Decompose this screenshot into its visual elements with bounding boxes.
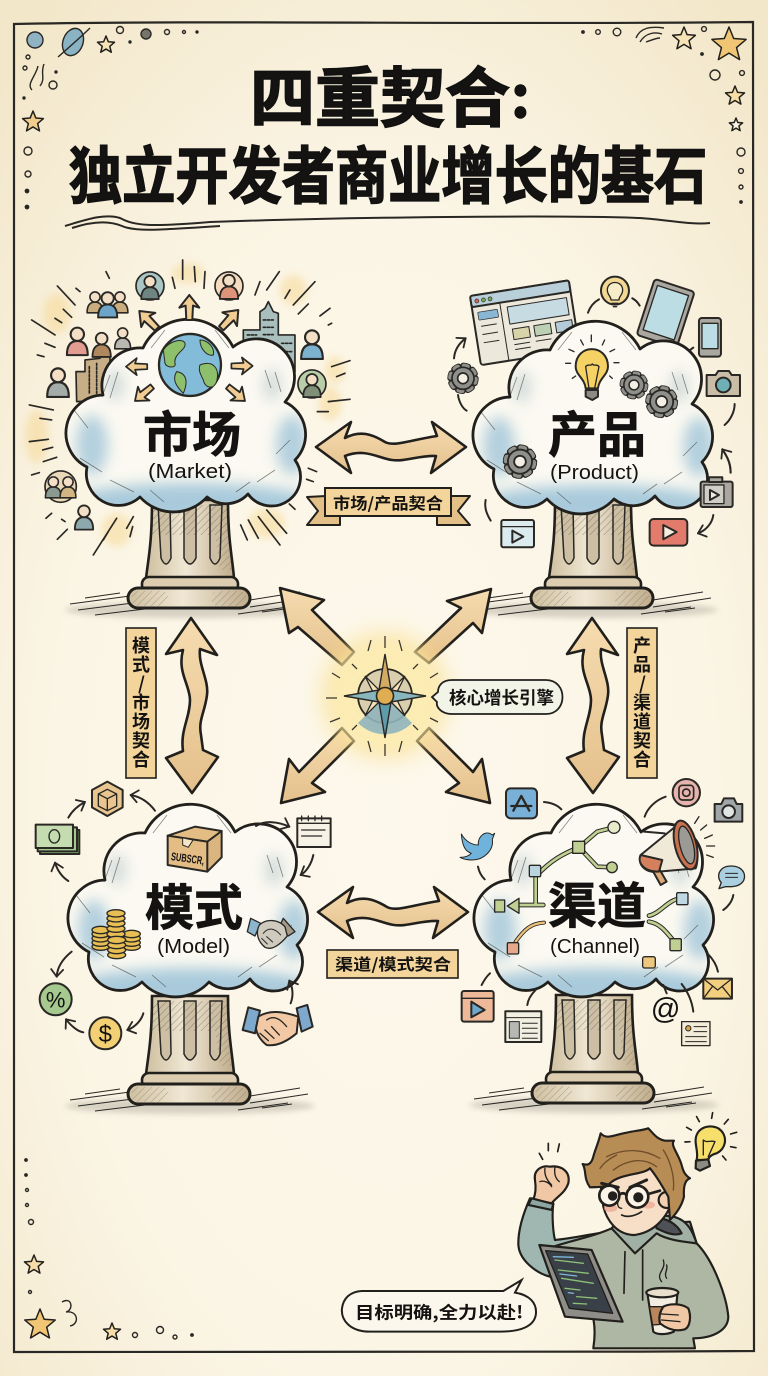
label: (Market): (Market): [148, 461, 232, 483]
corner decoration: bottom left: [24, 1159, 193, 1339]
column: channel: [469, 995, 719, 1113]
cloud: market: [65, 319, 315, 523]
icon: tablet: [637, 279, 695, 348]
glasses: [599, 1186, 660, 1208]
arrow: market-product: [316, 422, 466, 473]
people icons: [45, 272, 326, 530]
label: 模式: 模式: [145, 869, 243, 940]
icon: cube badge: [92, 782, 123, 816]
ribbon: market-product fit: [307, 488, 470, 525]
panel: market: [25, 260, 350, 618]
arrow: to product: [415, 589, 491, 663]
icon: browser window: [470, 280, 580, 365]
column: product: [468, 500, 718, 618]
market illustration behind cloud: [25, 260, 350, 555]
coffee cup: [648, 1295, 677, 1334]
icon: gears: [506, 373, 675, 476]
icon: subscription box: [168, 827, 222, 872]
label: model-market fit: 模式/市场契合: [132, 632, 150, 772]
icon: coins: [92, 910, 140, 959]
hoodie: [553, 1222, 728, 1348]
arrow: channel-model: [318, 887, 468, 938]
product icons behind cloud: [450, 277, 740, 521]
bubble: core growth engine: [432, 680, 562, 714]
icon: gear outside: [450, 338, 476, 411]
icon: calendar: [297, 816, 331, 847]
label: (Product): (Product): [550, 462, 639, 484]
icon: phone: [686, 318, 721, 357]
icon: at sign: @: [651, 992, 681, 1025]
character: developer: [518, 1113, 737, 1348]
hood: [612, 1216, 697, 1253]
label: (Model): (Model): [157, 936, 230, 958]
title: 四重契合: [250, 46, 510, 140]
buildings: [76, 302, 295, 402]
head: [600, 1166, 673, 1235]
channel icons: [460, 779, 745, 1046]
icon: mail: [703, 979, 732, 999]
icon: handshake gray: [247, 918, 295, 948]
icon: subscription box: SUBSCR,: [170, 851, 205, 868]
icon: bird: [460, 833, 495, 860]
corner decoration: top left: [23, 25, 198, 209]
icon: percent coin: [40, 983, 72, 1015]
icon: bulb badge: [588, 277, 640, 313]
connector strokes: [478, 797, 733, 1012]
icon: camera: [715, 798, 742, 822]
title: [69, 46, 707, 216]
icon: percent coin: %: [46, 987, 65, 1012]
arrow: to channel: [417, 728, 490, 803]
diagonal arrows: core engine: [280, 588, 491, 803]
icon: network lines: [495, 821, 688, 968]
model flow arrows: [55, 795, 313, 1032]
cloud: product: [472, 321, 722, 525]
column: market: [65, 500, 315, 618]
speech bubble: 目标明确,全力以赴!: [355, 1298, 523, 1323]
title: :: [511, 50, 530, 134]
sleeve: raised arm: [518, 1198, 613, 1277]
arrow: model-market: [166, 618, 218, 793]
icon: video window: [501, 520, 534, 547]
product icons over cloud: [501, 335, 733, 547]
cloud: model: [67, 804, 317, 1008]
arrow: to model: [281, 728, 354, 803]
icon: dollar coin: [89, 1017, 121, 1049]
tablet: [539, 1245, 623, 1322]
icon: app store: [506, 788, 537, 818]
cloud: channel: [473, 804, 723, 1008]
icon: instagram: [673, 779, 700, 806]
icon: play window: [462, 991, 494, 1022]
column: model: [65, 996, 315, 1114]
icon: megaphone: [640, 817, 715, 885]
label: product-channel fit: 产品/渠道契合: [633, 632, 651, 772]
label: (Channel): (Channel): [550, 936, 640, 958]
icon: chat bubble: [719, 866, 745, 889]
icon: red play: [650, 519, 687, 546]
label: product-channel fit: [627, 628, 657, 778]
label: channel-model fit: 渠道/模式契合: [335, 951, 451, 975]
label: 产品: 产品: [548, 396, 646, 467]
compass: [323, 634, 447, 758]
panel: model: [36, 782, 331, 1114]
arrow: product-channel: [567, 618, 619, 793]
hand: [659, 1304, 690, 1330]
title underline: [65, 216, 710, 230]
bulb: [696, 1126, 725, 1160]
panel: product: [450, 277, 740, 618]
panel: channel: [460, 779, 745, 1113]
fist: [533, 1166, 569, 1203]
label: 渠道: 渠道: [548, 867, 646, 938]
model icons: [36, 782, 331, 1049]
label: model-market fit: [126, 628, 156, 778]
arrow: to market: [280, 588, 354, 665]
label: channel-model fit: [327, 950, 458, 978]
ribbon: market-product fit: 市场/产品契合: [333, 490, 443, 514]
icon: dollar coin: $: [99, 1021, 112, 1048]
label: 市场: 市场: [143, 396, 241, 467]
bubble: core growth engine: 核心增长引擎: [449, 685, 554, 710]
icon: light bulb: [566, 335, 619, 400]
icon: handshake: [243, 1005, 313, 1045]
title: 独立开发者商业增长的基石: [69, 126, 707, 216]
hair: [583, 1128, 690, 1220]
icon: article window: [505, 1011, 541, 1042]
icon: video camera: [698, 477, 733, 533]
icon: camera: [707, 371, 740, 396]
market globe and arrows: [126, 295, 253, 408]
icon: id card: [682, 1022, 710, 1046]
icon: money stack: [36, 825, 79, 854]
speech bubble: [342, 1280, 536, 1332]
corner decoration: top right: [582, 27, 746, 203]
